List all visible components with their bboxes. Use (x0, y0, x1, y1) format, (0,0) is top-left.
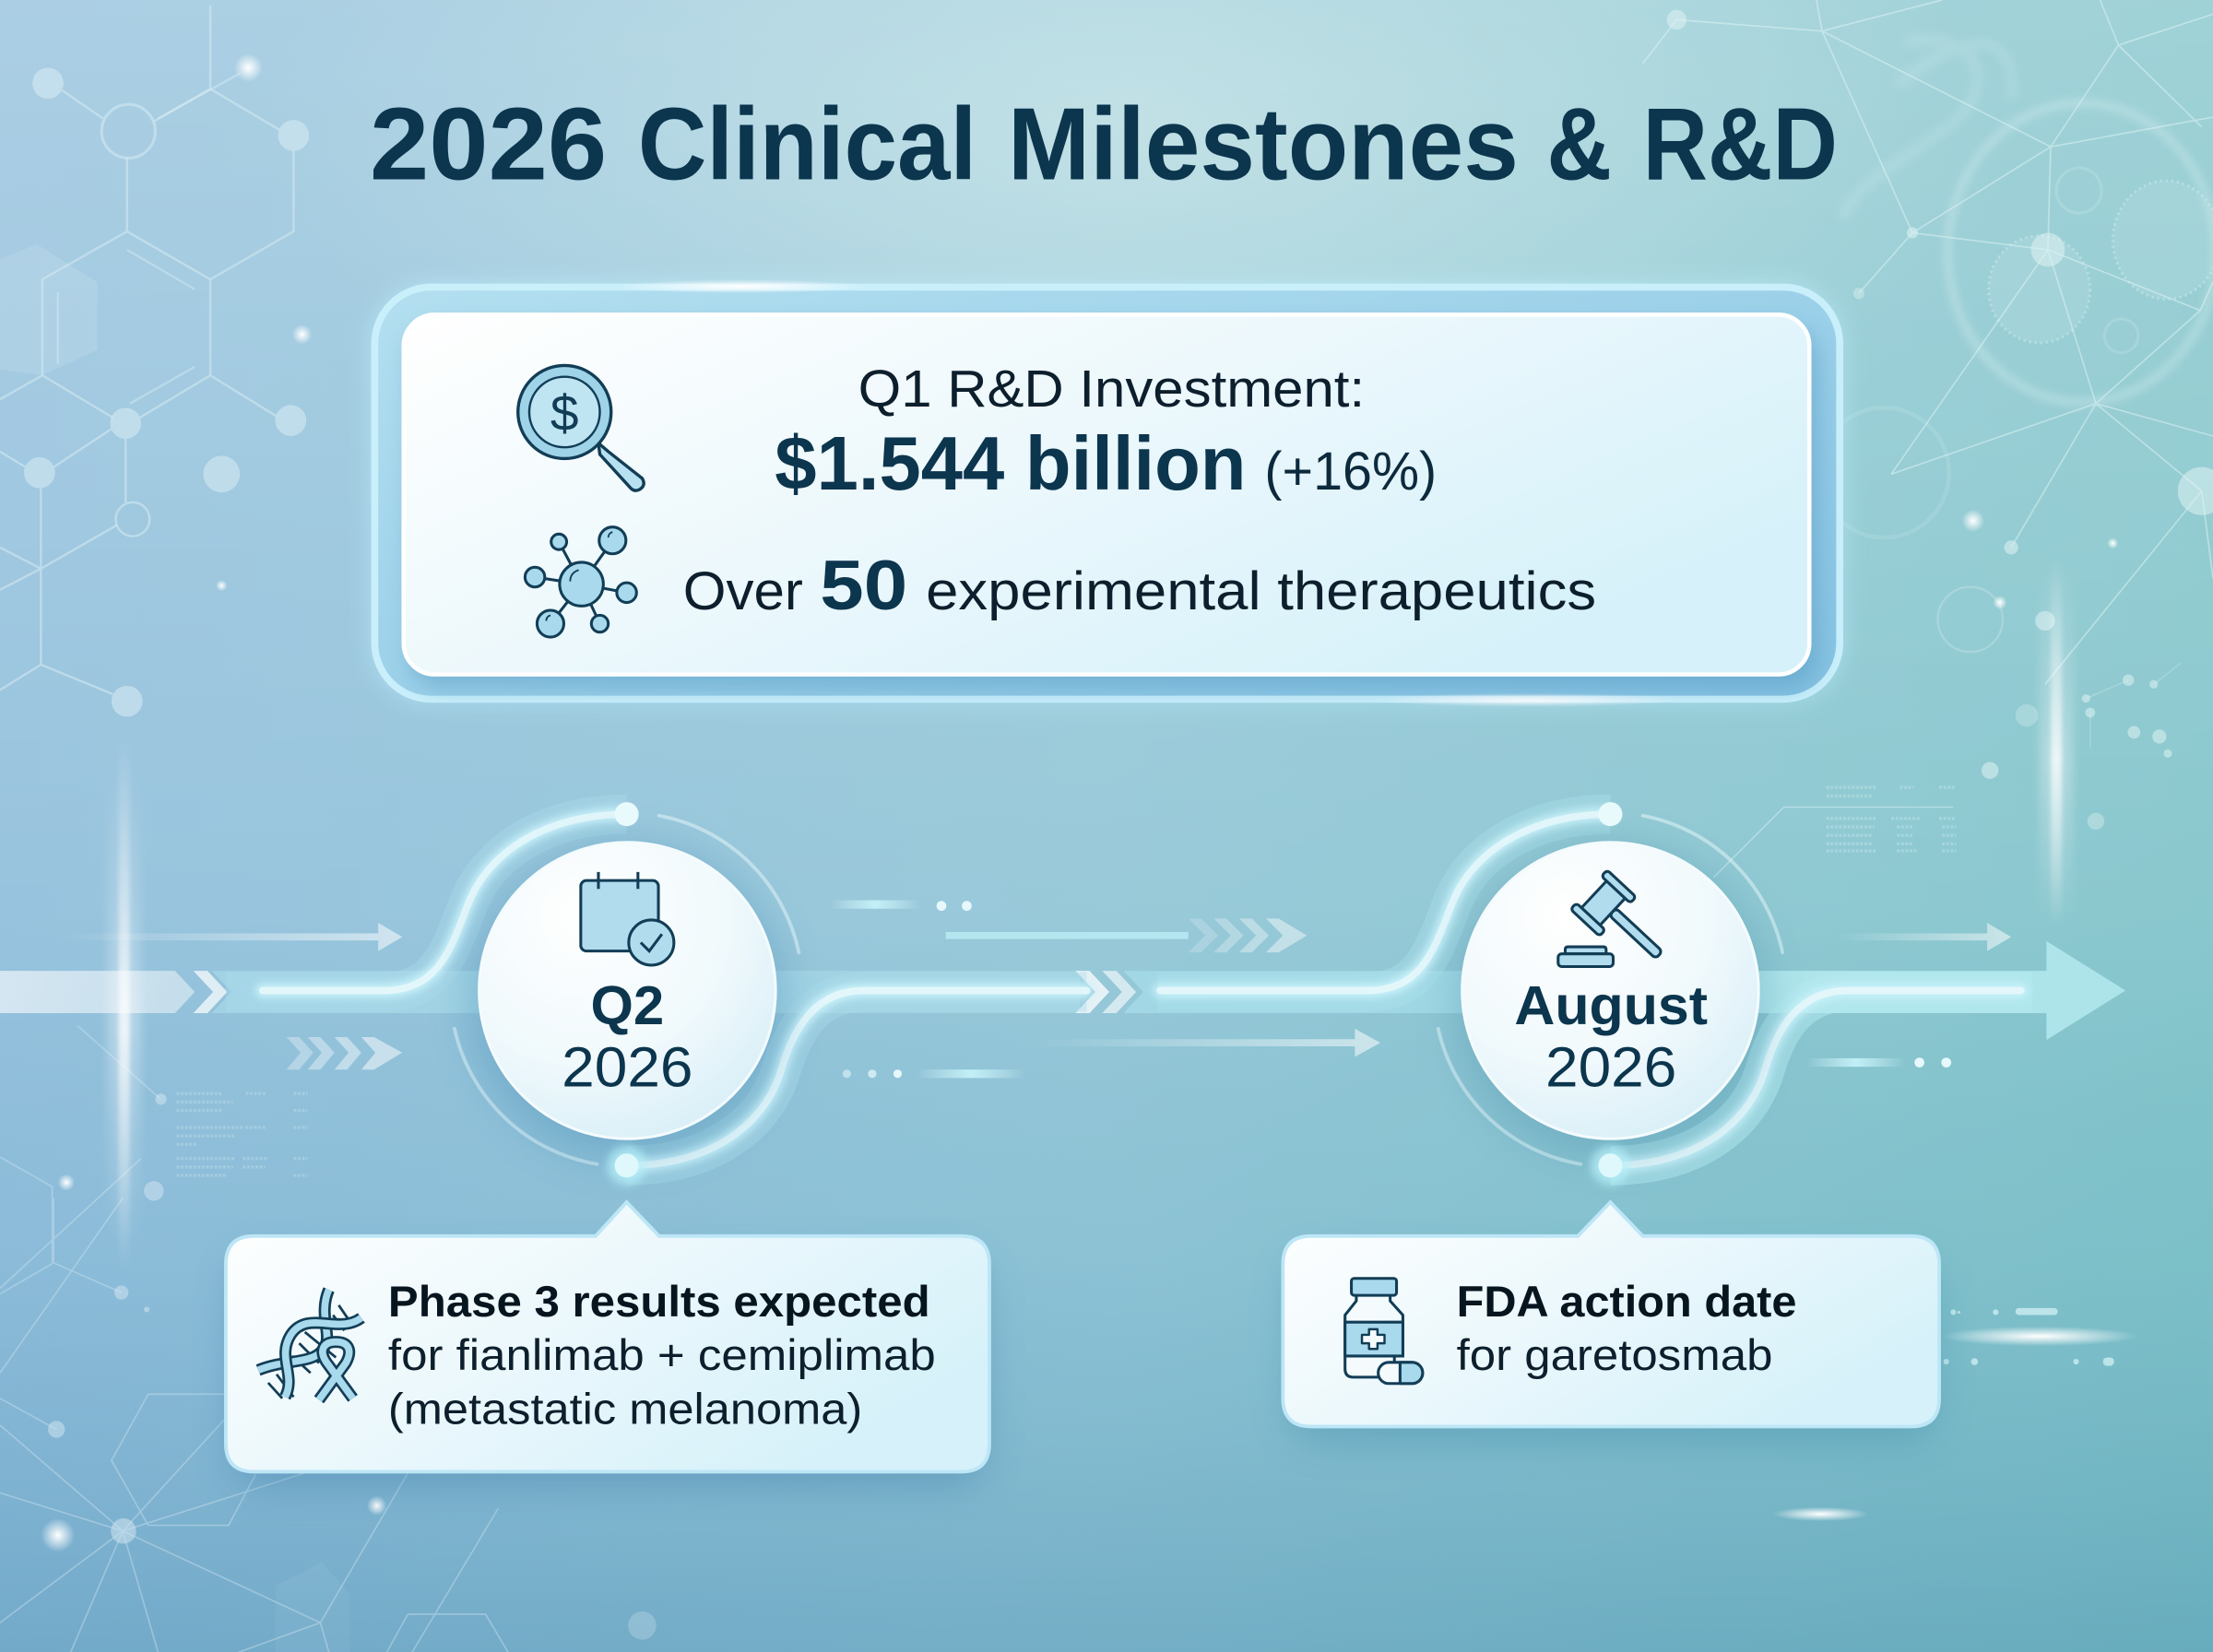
icon: calendar with check (581, 872, 674, 965)
text: investment amount: $1.544 billion (775, 420, 1247, 506)
panel: Q1 R&D investment (372, 279, 1843, 707)
light beams (107, 559, 2138, 1521)
title: Clinical (638, 86, 976, 201)
text: growth percentage: (+16%) (1264, 442, 1437, 502)
text: FDA action date: FDA action date (1457, 1278, 1796, 1327)
text: over 50 experimental therapeutics: experimental therapeutics (926, 561, 1596, 621)
callout: FDA action date (1283, 1202, 1939, 1439)
text: over 50 experimental therapeutics: Over (683, 561, 803, 621)
disc: August (1462, 843, 1758, 1139)
title: & (1547, 86, 1612, 201)
icon: gavel (1558, 870, 1677, 974)
connector curves: August (1157, 814, 2032, 1165)
background molecule network: top right (1643, 0, 2213, 830)
background network: bottom left (0, 1026, 657, 1652)
text: Q1 R&D investment label: Q1 R&D Investment: (858, 360, 1365, 419)
text: indication: (metastatic melanoma) (388, 1385, 862, 1434)
title: 2026 (370, 86, 607, 201)
text: over 50 experimental therapeutics: 50 (820, 547, 907, 625)
text: for garetosmab: for garetosmab (1457, 1331, 1772, 1380)
text: 2026: 2026 (562, 1036, 693, 1099)
icon: DNA and ribbon (258, 1290, 361, 1399)
title: Milestones (1008, 86, 1519, 201)
text: Q2: Q2 (591, 974, 664, 1036)
title: R&D (1643, 86, 1838, 201)
small dots and dashes around the right callout (1944, 1308, 2114, 1366)
callout: Phase 3 results (226, 1202, 989, 1484)
background molecule network: top left (0, 6, 309, 717)
disc: Q2 (479, 843, 775, 1139)
text: drug names: for fianlimab + cemiplimab (388, 1331, 936, 1380)
title (370, 86, 1838, 201)
decorative timeline arrows and dashes (56, 901, 2011, 1078)
icon: magnifying glass with dollar (518, 365, 644, 490)
text: 2026: 2026 (1545, 1036, 1676, 1099)
node: Q2 2026 (226, 802, 1087, 1186)
text: August: August (1514, 974, 1708, 1036)
icon: magnifying glass with dollar: $ (550, 384, 579, 442)
text: over 50 experimental therapeutics (683, 547, 1596, 625)
node: August 2026 (1157, 802, 2032, 1186)
icon: medicine bottle and pill (1345, 1279, 1423, 1384)
timeline base band and arrow (0, 941, 2125, 1040)
icon: molecule network (525, 527, 636, 637)
connector curves: Q2 (226, 814, 1087, 1165)
background data lines: left (176, 1093, 308, 1175)
text: Phase 3 results expected: Phase 3 results expected (388, 1278, 930, 1327)
background data lines: right (1713, 787, 1956, 878)
